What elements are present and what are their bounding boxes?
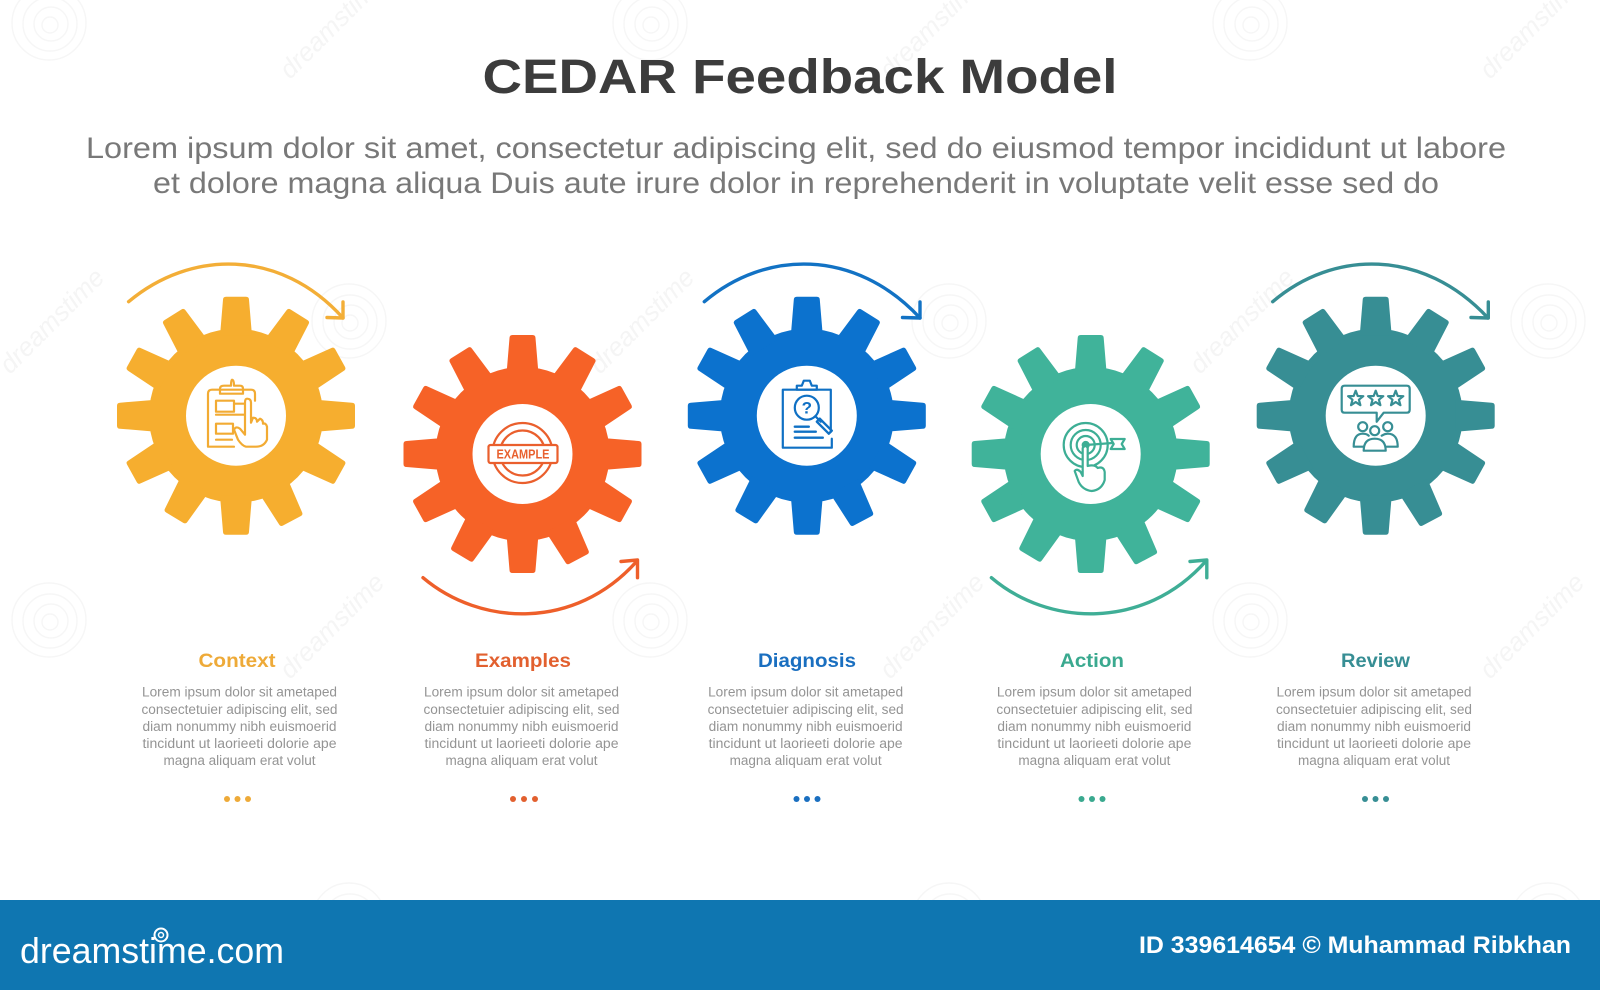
gear: diagnosis	[688, 297, 926, 535]
description: context: diam nonummy nibh euismoerid	[142, 719, 336, 734]
arrow: review outgoing	[1273, 264, 1488, 318]
step 3: diagnosis	[688, 264, 926, 802]
description: diagnosis: magna aliquam erat volut	[730, 753, 882, 768]
description: examples: tincidunt ut laorieeti dolorie ape	[424, 736, 618, 751]
label: action: Action	[1060, 651, 1124, 672]
label: diagnosis: Diagnosis	[758, 651, 856, 672]
step 2: examples	[404, 335, 642, 802]
description: action: diam nonummy nibh euismoerid	[997, 719, 1191, 734]
description: context	[142, 684, 338, 768]
footer logo: dreamstime.com	[20, 930, 284, 971]
description: examples: magna aliquam erat volut	[446, 753, 598, 768]
text: dreamstime	[583, 262, 700, 379]
label: review: Review	[1341, 651, 1410, 672]
gear: context	[117, 297, 355, 535]
subtitle text block	[86, 132, 1506, 200]
title: CEDAR Feedback Model	[482, 51, 1118, 104]
icon: target with hand	[1041, 404, 1141, 504]
icon: clipboard with pointing hand	[186, 366, 286, 466]
description: diagnosis	[708, 684, 904, 768]
description: examples: Lorem ipsum dolor sit ametaped	[424, 684, 619, 700]
gear: review	[1257, 297, 1495, 535]
description: diagnosis: consectetuier adipiscing elit, sed	[708, 702, 904, 717]
step 1: context	[117, 264, 355, 802]
label: context: Context	[198, 651, 276, 672]
description: action: consectetuier adipiscing elit, sed	[996, 702, 1192, 717]
description: examples: consectetuier adipiscing elit, sed	[424, 702, 620, 717]
description: review: Lorem ipsum dolor sit ametaped	[1276, 684, 1472, 700]
label: examples: Examples	[475, 651, 571, 672]
description: context: magna aliquam erat volut	[164, 753, 316, 768]
icon: example stamp: EXAMPLE	[496, 448, 550, 462]
description: examples	[424, 684, 620, 768]
description: diagnosis: tincidunt ut laorieeti dolorie ape	[709, 736, 903, 751]
description: action	[996, 684, 1192, 768]
step 4: action	[972, 335, 1210, 802]
description: context: tincidunt ut laorieeti dolorie ape	[142, 736, 336, 751]
description: review	[1276, 684, 1472, 768]
footer credit: ID 339614654 © Muhammad Ribkhan	[1139, 932, 1571, 959]
description: review: diam nonummy nibh euismoerid	[1277, 719, 1471, 734]
dots: review	[1362, 796, 1389, 802]
step 5: review	[1257, 264, 1495, 802]
arrow: diagnosis to action	[704, 264, 920, 318]
text: dreamstime	[273, 567, 390, 684]
description: action: tincidunt ut laorieeti dolorie ape	[997, 736, 1191, 751]
description: context: Lorem ipsum dolor sit ametaped	[142, 684, 337, 700]
description: diagnosis: Lorem ipsum dolor sit ametaped	[708, 684, 903, 700]
arrow: context to examples	[129, 264, 343, 318]
description: review: tincidunt ut laorieeti dolorie ape	[1277, 736, 1471, 751]
arrow: action to review	[991, 560, 1207, 614]
text: dreamstime	[1183, 262, 1300, 379]
dots: diagnosis	[794, 796, 820, 802]
icon: clipboard with magnifier	[757, 366, 857, 466]
description: action: magna aliquam erat volut	[1018, 753, 1171, 768]
icon: star rating bubble with people	[1326, 366, 1426, 466]
gear: action	[972, 335, 1210, 573]
description: action: Lorem ipsum dolor sit ametaped	[997, 684, 1192, 700]
icon: example stamp	[472, 404, 572, 504]
icon: clipboard with magnifier: ?	[802, 399, 812, 418]
description: examples: diam nonummy nibh euismoerid	[424, 719, 618, 734]
footer bar	[0, 900, 1600, 990]
subtitle text block: et dolore magna aliqua Duis aute irure dolor in reprehenderit in voluptate velit esse sed do	[153, 167, 1439, 200]
text: dreamstime	[1473, 567, 1590, 684]
description: diagnosis: diam nonummy nibh euismoerid	[709, 719, 903, 734]
description: review: magna aliquam erat volut	[1298, 753, 1450, 768]
gear: examples	[404, 335, 642, 573]
arrow: examples to diagnosis	[423, 560, 638, 614]
dots: context	[224, 796, 251, 802]
subtitle text block: Lorem ipsum dolor sit amet, consectetur adipiscing elit, sed do eiusmod tempor incididunt ut labore	[86, 132, 1506, 165]
description: review: consectetuier adipiscing elit, sed	[1276, 702, 1472, 717]
text: dreamstime	[873, 567, 990, 684]
description: context: consectetuier adipiscing elit, sed	[142, 702, 338, 717]
dots: examples	[510, 796, 538, 802]
dots: action	[1078, 796, 1106, 802]
